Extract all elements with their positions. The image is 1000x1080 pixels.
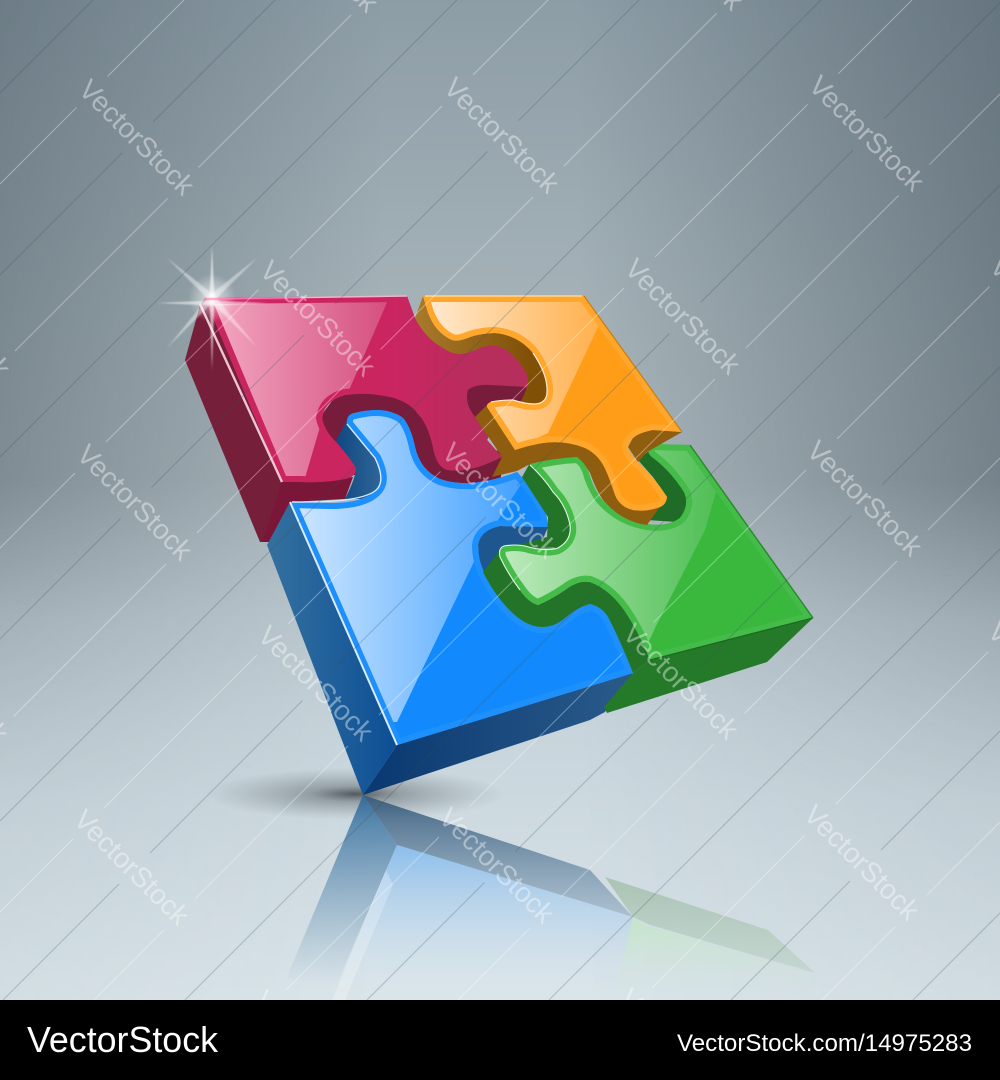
watermarks: VectorStock xyxy=(254,255,382,383)
watermarks: VectorStock xyxy=(801,435,929,563)
floor shadow xyxy=(205,768,505,820)
floor reflection of the puzzle xyxy=(287,795,815,1000)
footer brand text: VectorStock xyxy=(27,1019,219,1060)
puzzle piece: blue xyxy=(267,410,633,795)
watermarks: V xyxy=(614,982,649,1018)
watermarks: VectorStock xyxy=(433,802,561,930)
watermarks: VectorStock xyxy=(73,74,201,202)
footer image id text: VectorStock.com/14975283 xyxy=(677,1030,972,1057)
watermarks: VectorStock xyxy=(71,439,199,567)
watermarks: VectorStock xyxy=(619,253,747,381)
watermarks: VectorStock xyxy=(617,618,745,746)
footer band xyxy=(0,1000,1000,1080)
puzzle piece: orange xyxy=(415,296,682,525)
puzzle piece: red xyxy=(185,296,545,542)
sparkle at red corner xyxy=(157,246,300,370)
watermarks: VectorStock xyxy=(803,70,931,198)
puzzle piece: green xyxy=(483,444,813,713)
watermarks: VectorStock xyxy=(438,72,566,200)
watermarks: VectorStock xyxy=(798,799,926,927)
watermarks: VectorStock xyxy=(252,620,380,748)
watermarks: VectorStock xyxy=(436,437,564,565)
watermarks: V xyxy=(249,984,284,1020)
watermarks: VectorStock xyxy=(68,804,196,932)
